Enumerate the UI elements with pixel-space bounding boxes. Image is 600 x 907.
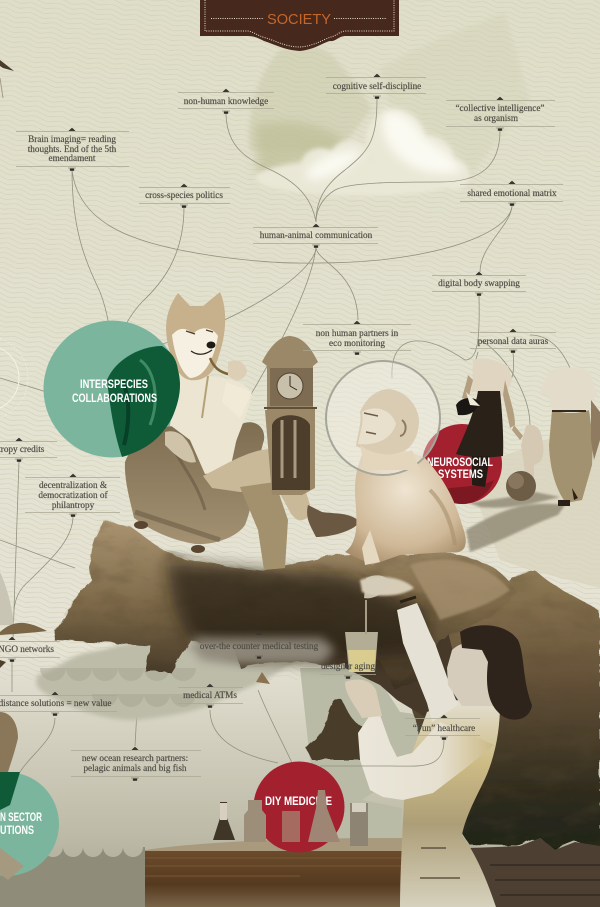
label: brain imaging: thoughts. End of the 5th [28,144,117,154]
label: human-animal communication: human-animal communication [260,230,373,240]
grey island reflection with scallops [36,642,300,720]
hand on knee [165,431,196,463]
label: over-the-counter medical testing: over-the counter medical testing [200,641,319,651]
coat body [400,700,500,907]
dog head [166,292,247,380]
header banner: society [200,0,399,51]
green circle: interspecies collaborations [44,320,180,458]
label: non human partners [303,321,411,355]
label: designer aging: designer aging [321,661,375,671]
sector solutions label: N SECTOR [0,810,42,824]
lab bottles [213,790,368,846]
sea at bottom right [470,838,600,907]
banner title: SOCIETY [267,11,331,28]
label: brain imaging [16,128,129,171]
sector solutions label [0,810,42,837]
beaker and pouring flask [345,575,416,672]
child and ball [506,425,544,501]
ground shadows of walking people [466,492,565,552]
cloud [255,110,470,196]
label: distance solutions [0,692,117,716]
label: cross-species politics [139,184,230,208]
label: NGO networks [0,637,60,662]
diy medicine red circle [254,762,344,852]
pale ground plane under people [465,420,600,588]
label: decentralization: philantropy [52,500,95,510]
label: digital body swapping [432,272,526,296]
label: collective intelligence: as organism [474,113,518,123]
label: non-human knowledge: non-human knowledge [184,96,268,106]
green circle lower left: sector solutions [0,712,59,880]
dark rock behind raised arm [340,590,470,720]
label: medical ATMs [178,684,243,708]
label: digital body swapping: digital body swapping [438,278,520,288]
label: shared emotional matrix [460,181,563,206]
grey-green haze behind woman [300,668,430,850]
dog gentleman [107,292,312,570]
label: non-human knowledge [178,89,274,114]
sector solutions label: UTIONS [0,823,34,837]
right rock mass [400,570,600,850]
green jacket shoulder under the circle [107,346,180,457]
walking man [539,368,600,506]
armchair [125,422,264,553]
label: over-the-counter medical testing [200,632,319,659]
bird fragment top left [0,60,14,98]
lab woman [345,603,532,907]
neck and face [447,642,496,706]
grandfather clock [262,336,318,495]
label: non human partners: non human partners in [316,328,399,338]
label: distance solutions: distance solutions = new value [0,698,111,708]
label: designer aging [321,661,376,679]
lower arm [358,715,494,800]
label: personal data auras: personal data auras [478,336,549,346]
label: collective intelligence [446,97,555,131]
label: personal data auras [470,329,556,353]
suit and legs [170,372,312,570]
label: decentralization: decentralization & [39,480,107,490]
hand holding beaker [345,680,382,718]
label: fun healthcare [320,715,480,766]
label: shared emotional matrix: shared emotional matrix [467,188,557,198]
label: philantropy credits [0,438,57,462]
concentric rings at left edge [0,336,28,420]
pocket [420,848,460,878]
label: decentralization [25,474,120,517]
neurosocial label: NEUROSOCIAL [427,455,493,469]
label: brain imaging: emendament [49,153,96,163]
connector lines: upper network [0,97,570,772]
label: cognitive self-discipline: cognitive self-discipline [333,81,421,91]
fluffy seated body [345,449,466,565]
grey smoke behind over-the-counter label [192,638,335,664]
label: brain imaging: Brain imaging= reading [28,134,116,144]
hair [460,625,532,720]
boot [307,505,360,537]
neurosocial label [427,455,493,481]
interspecies label: COLLABORATIONS [72,391,157,405]
label: medical ATMs: medical ATMs [183,690,237,700]
label: collective intelligence: “collective intelligence” [455,103,545,113]
label: fun healthcare: “Fun” healthcare [413,723,475,733]
central rock island [54,522,516,690]
label: human-animal communication [253,224,378,248]
diy medicine red circle: DIY MEDICINE [265,794,332,808]
glass bubble with head [326,361,440,475]
table [145,838,403,907]
label: new ocean research partners [71,747,201,781]
label: cross-species politics: cross-species politics [145,190,223,200]
left rock fragment and seashell [0,572,47,668]
neurosocial red circle [422,424,502,504]
small rock under designer aging [256,672,270,684]
label: non human partners: eco monitoring [329,338,385,348]
interspecies label [72,377,157,405]
lower sea with scallops [0,847,145,907]
interspecies label: INTERSPECIES [80,377,148,391]
label: new ocean research partners: pelagic animals and big fish [83,763,187,773]
label: cognitive self-discipline [326,74,426,99]
label: new ocean research partners: new ocean research partners: [82,753,188,763]
mountain shadows behind cloud [249,12,530,178]
small far rock with reflection [306,698,362,760]
label: decentralization: democratization of [38,490,109,500]
walking woman [456,358,515,487]
raised arm [397,603,458,722]
neurosocial label: SYSTEMS [438,467,483,481]
